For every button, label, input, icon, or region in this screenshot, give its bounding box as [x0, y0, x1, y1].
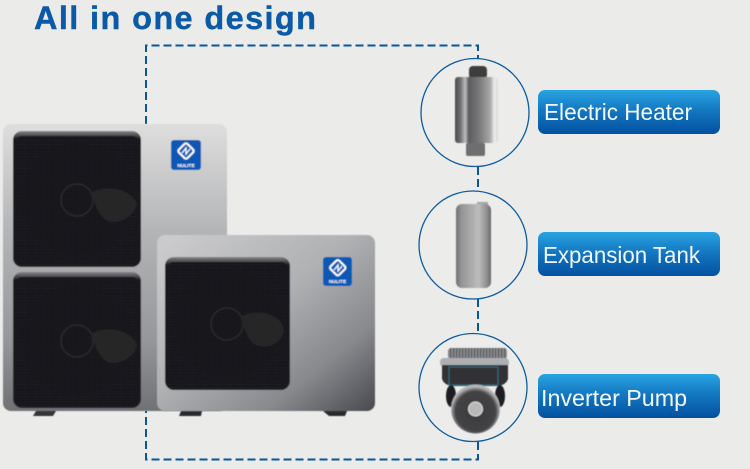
- small heat pump unit: [157, 235, 375, 416]
- heater label: [538, 90, 720, 134]
- component: expansion tank: [419, 191, 720, 299]
- upper fan: [13, 131, 141, 267]
- logo: large unit: NULITE: [177, 163, 195, 169]
- icon: expansion tank: [456, 202, 491, 288]
- tank label: [538, 232, 720, 276]
- dashed connector frame: [146, 46, 478, 460]
- pump label: Inverter Pump: [541, 385, 687, 411]
- heater circle: [421, 58, 529, 166]
- small unit casing: [157, 235, 375, 411]
- large heat pump unit: [3, 124, 227, 416]
- component: inverter pump: [419, 334, 720, 442]
- small unit fan: [165, 257, 290, 390]
- tank label: Expansion Tank: [543, 242, 700, 268]
- pump label: [538, 374, 720, 418]
- heater label: Electric Heater: [544, 99, 692, 125]
- tank circle: [419, 191, 527, 299]
- lower fan: [13, 272, 141, 408]
- icon: inverter pump: [440, 348, 509, 434]
- unit feet: [33, 411, 56, 416]
- title: All in one design: [34, 0, 316, 36]
- pump circle: [419, 334, 527, 442]
- icon: electric heater: [455, 66, 498, 156]
- logo: large unit: [171, 140, 201, 170]
- small unit feet: [179, 411, 347, 416]
- component: electric heater: [421, 58, 720, 166]
- logo: small unit: [323, 257, 352, 286]
- logo: small unit: NULITE: [329, 279, 347, 285]
- large unit casing: [3, 124, 227, 411]
